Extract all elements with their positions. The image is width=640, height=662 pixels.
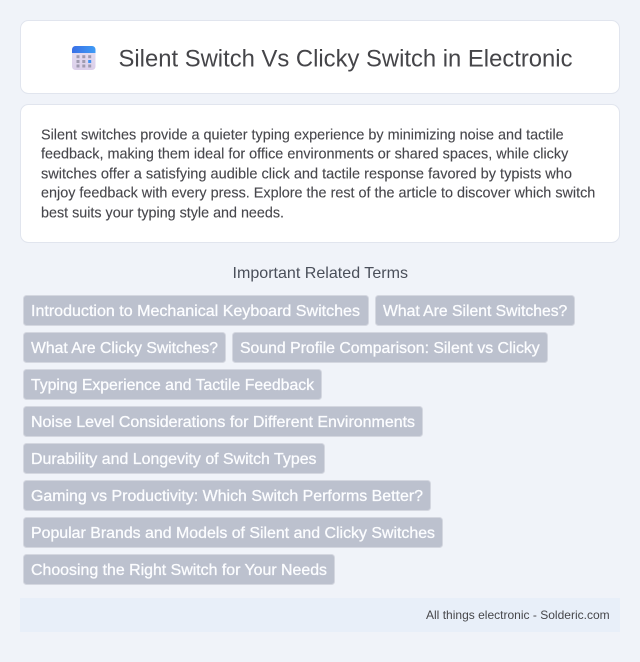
text block: description: enjoy feedback with every press. Explore the rest of the article to discover which switch <box>41 186 595 202</box>
tag: popular brands <box>24 518 442 548</box>
footer credit: All things electronic - Solderic.com <box>426 608 610 622</box>
tag: choosing: Choosing the Right Switch for Your Needs <box>31 562 327 579</box>
tag: sound profile: Sound Profile Comparison: Silent vs Clicky <box>240 340 540 357</box>
tag: clicky switches: What Are Clicky Switches? <box>31 340 218 357</box>
panel: description <box>20 104 620 242</box>
text block: description: Silent switches provide a quieter typing experience by minimizing noise and tactile <box>41 128 564 144</box>
tag: sound profile <box>232 332 548 362</box>
tag: gaming vs productivity: Gaming vs Productivity: Which Switch Performs Better? <box>31 488 423 505</box>
tag: introduction <box>24 296 368 326</box>
tag: gaming vs productivity <box>24 480 430 510</box>
text block: description <box>41 128 595 222</box>
title: Silent Switch Vs Clicky Switch in Electronic <box>118 46 572 72</box>
tag: clicky switches <box>24 332 226 362</box>
text block: description: best suits your typing style and needs. <box>41 206 284 222</box>
tag: typing experience <box>24 370 322 400</box>
tag: silent switches: What Are Silent Switches? <box>383 303 567 320</box>
tag: introduction: Introduction to Mechanical Keyboard Switches <box>31 303 360 320</box>
tag: typing experience: Typing Experience and Tactile Feedback <box>31 377 315 394</box>
tag: popular brands: Popular Brands and Models of Silent and Clicky Switches <box>31 525 435 542</box>
icon: calendar keypad <box>72 46 96 70</box>
footer <box>20 598 620 632</box>
tag: choosing <box>24 554 334 584</box>
tag: durability: Durability and Longevity of Switch Types <box>31 451 316 468</box>
text block: description: feedback, making them ideal for office environments or shared spaces, while clicky <box>41 146 569 162</box>
tag list <box>24 296 574 584</box>
panel: header <box>20 20 620 94</box>
heading: related terms: Important Related Terms <box>232 265 408 282</box>
text block: description: switches offer a satisfying audible click and tactile response favored by typists who <box>41 166 572 182</box>
tag: durability <box>24 444 324 474</box>
tag: noise level: Noise Level Considerations for Different Environments <box>31 414 415 431</box>
tag: noise level <box>24 406 422 436</box>
tag: silent switches <box>376 296 574 326</box>
